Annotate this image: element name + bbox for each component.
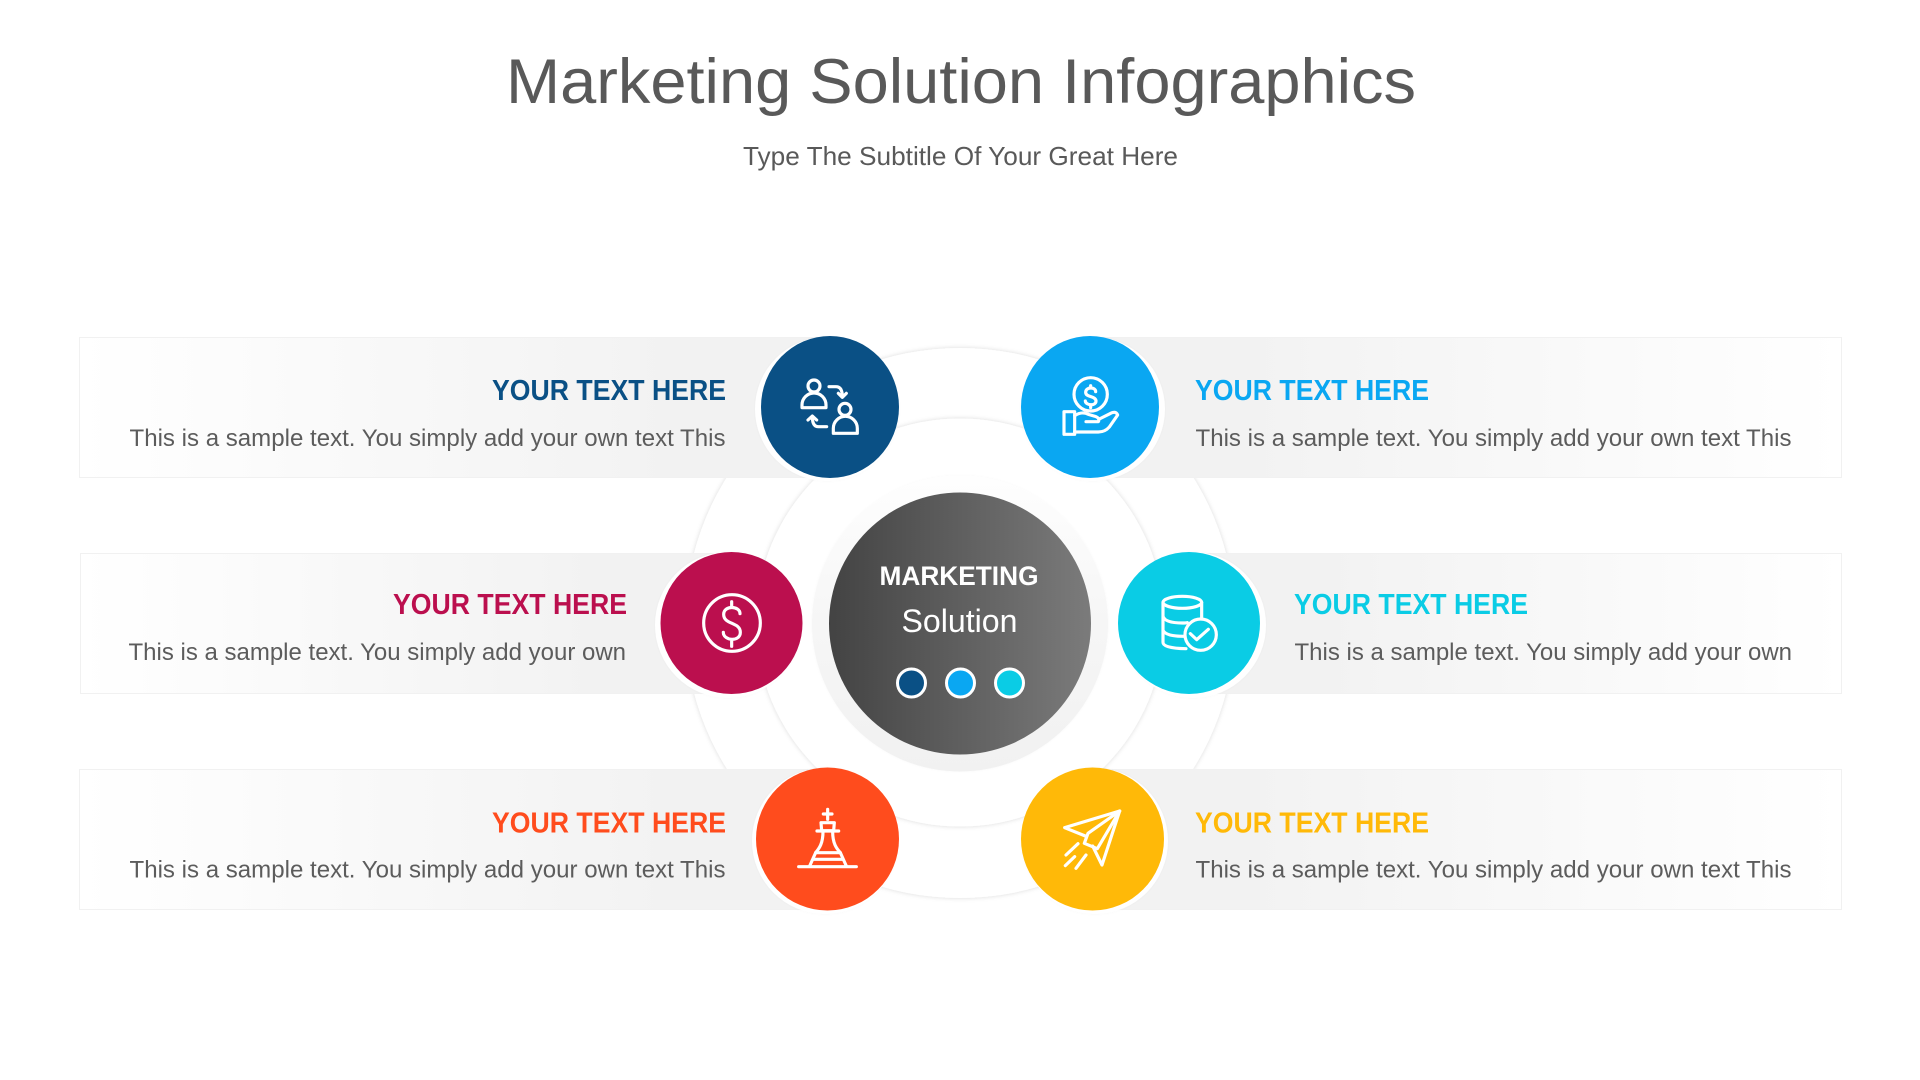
heading: middle right: YOUR TEXT HERE: [1294, 589, 1528, 621]
hub dots: [898, 669, 1024, 697]
panel: bottom right: [1092, 770, 1842, 910]
panel: top right: [1090, 338, 1842, 478]
node: crimson dollar: [655, 552, 802, 698]
body text: bottom left: This is a sample text. You simply add your own text This: [130, 856, 726, 884]
hub heading: MARKETING: [880, 561, 1038, 591]
hub subheading: Solution: [902, 603, 1018, 639]
title: Marketing Solution Infographics: [506, 47, 1416, 117]
heading: bottom left: YOUR TEXT HERE: [492, 808, 726, 840]
concentric background rings: [685, 348, 1235, 898]
subtitle: Type The Subtitle Of Your Great Here: [743, 141, 1178, 171]
body text: top right: This is a sample text. You simply add your own text This: [1196, 425, 1792, 452]
icon: paper plane: [1065, 811, 1120, 868]
body text: bottom right: This is a sample text. You simply add your own text This: [1196, 856, 1792, 884]
icon: database check: [1163, 596, 1216, 650]
heading: top right: YOUR TEXT HERE: [1195, 375, 1429, 407]
panel: middle left: [80, 554, 730, 694]
panel: middle right: [1190, 554, 1842, 694]
body text: middle right: This is a sample text. You simply add your own: [1294, 639, 1792, 666]
node: navy people exchange: [755, 336, 899, 481]
node: red chess piece: [752, 768, 899, 914]
node: blue money in hand: [1021, 336, 1165, 481]
heading: top left: YOUR TEXT HERE: [492, 375, 726, 407]
panel: bottom left: [80, 770, 828, 910]
panel: top left: [80, 338, 830, 478]
icon: money in hand: [1064, 378, 1118, 434]
icon: chess king: [799, 809, 856, 867]
heading: bottom right: YOUR TEXT HERE: [1195, 808, 1429, 840]
body text: middle left: This is a sample text. You simply add your own: [128, 639, 626, 666]
node: amber paper plane: [1021, 768, 1168, 914]
icon: people exchange: [802, 380, 857, 433]
icon: dollar coin: [704, 595, 760, 651]
body text: top left: This is a sample text. You simply add your own text This: [130, 425, 726, 452]
heading: middle left: YOUR TEXT HERE: [393, 589, 627, 621]
center hub: [812, 476, 1108, 772]
node: cyan database check: [1118, 552, 1266, 698]
